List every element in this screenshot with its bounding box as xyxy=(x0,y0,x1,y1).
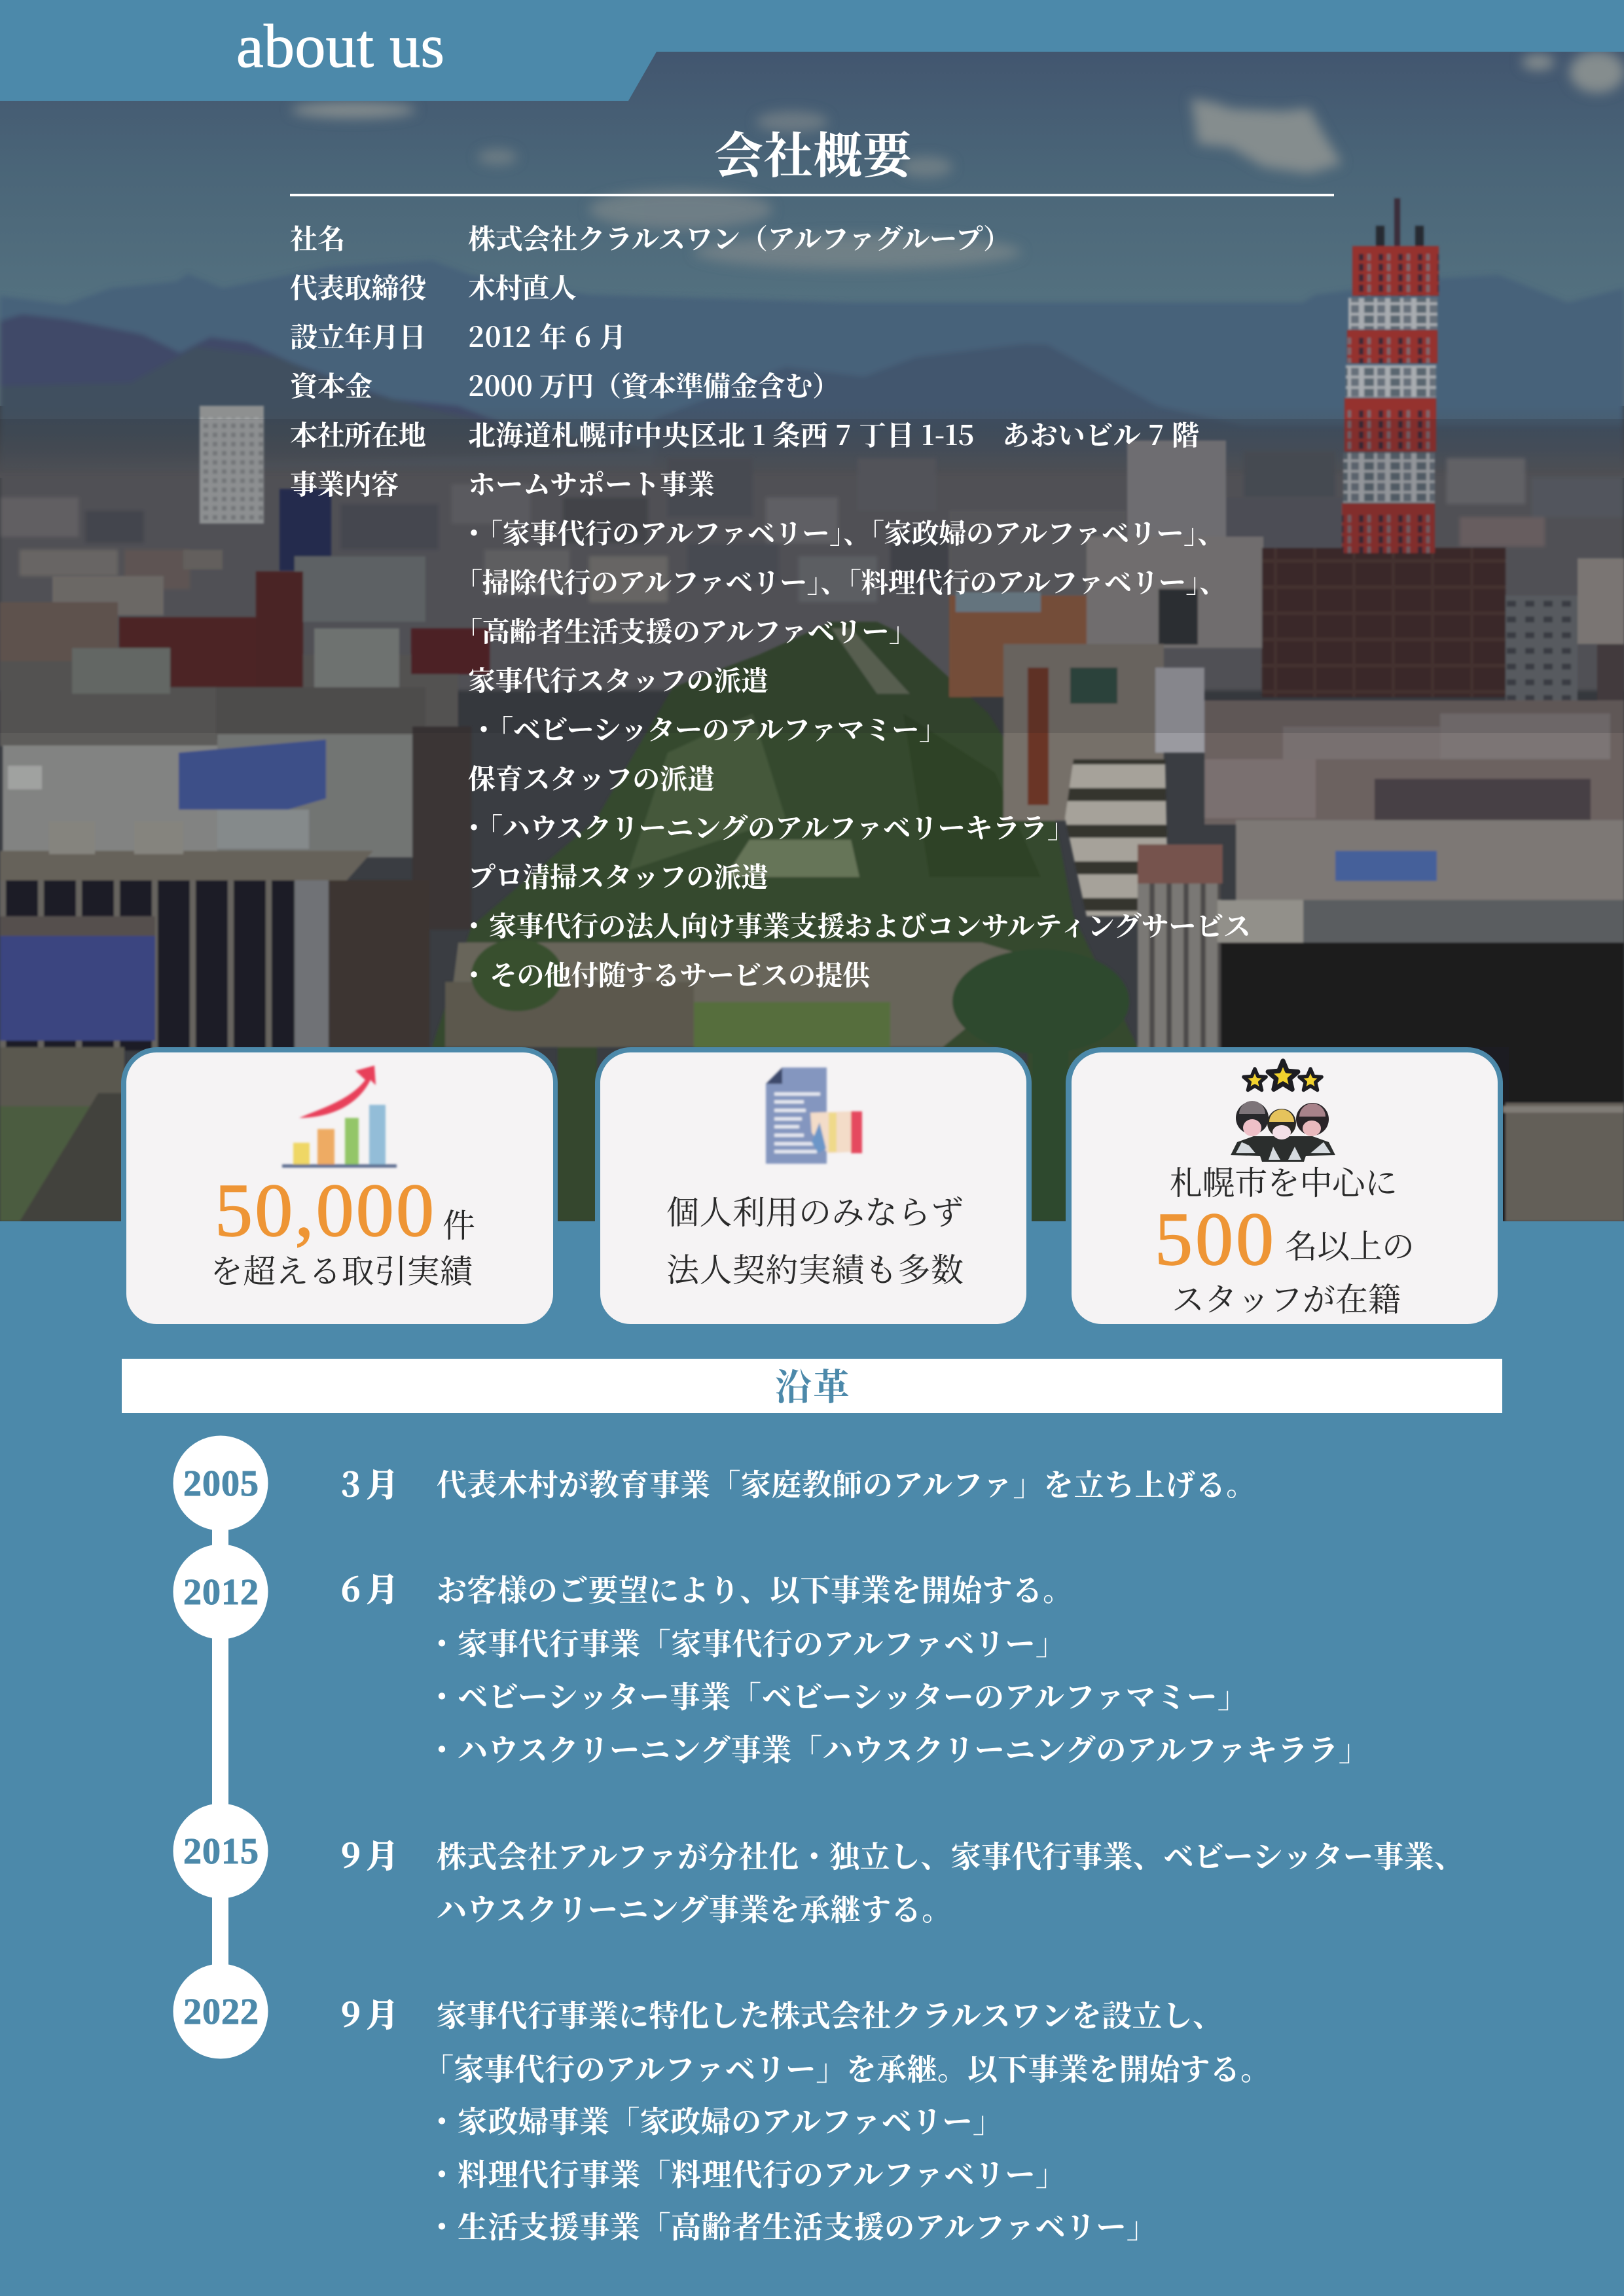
unit: 名以上の xyxy=(1285,1221,1415,1268)
card: 50,000 transactions xyxy=(121,1047,558,1329)
panel: company overview xyxy=(290,117,1334,994)
history 2015: 9 月 xyxy=(341,1830,399,1877)
section heading: history xyxy=(122,1359,1502,1413)
history 2022: 家政婦事業「家政婦のアルファベリー」 xyxy=(458,2098,1003,2142)
history 2022: ・ xyxy=(427,2151,457,2195)
right buildings xyxy=(1127,440,1226,553)
company table labels: 事業内容 xyxy=(290,463,399,503)
caption bottom: スタッフが在籍 xyxy=(1172,1274,1401,1321)
history 2012 xyxy=(341,1564,1369,1770)
company table values: 北海道札幌市中央区北 1 条西 7 丁目 1-15 あおいビル 7 階 xyxy=(468,414,1199,454)
history 2022: 料理代行事業「料理代行のアルファベリー」 xyxy=(458,2151,1066,2195)
marker 2012: 2012 xyxy=(183,1572,259,1613)
marker 2015 xyxy=(173,1804,268,1898)
company table values: その他付随するサービスの提供 xyxy=(490,954,872,994)
heading: company overview: 会社概要 xyxy=(714,117,913,187)
company table labels: 資本金 xyxy=(290,365,372,404)
history 2012: 6 月 xyxy=(341,1564,399,1611)
history 2015: ハウスクリーニング事業を承継する。 xyxy=(437,1886,952,1929)
background: Sapporo city photo xyxy=(0,0,1624,1221)
company table values: 株式会社クラルスワン（アルファグループ） xyxy=(468,218,1011,257)
history 2022: ・ xyxy=(427,2098,457,2142)
company table labels: 代表取締役 xyxy=(290,267,426,306)
marker 2012 xyxy=(173,1545,268,1639)
radio tower xyxy=(1394,198,1400,246)
timeline spine and year markers xyxy=(173,1436,268,2059)
icon: document and hand xyxy=(766,1067,862,1164)
company table values xyxy=(455,218,1251,994)
marker 2005: 2005 xyxy=(183,1463,259,1504)
company table values: 「ハウスクリーニングのアルファベリーキララ」 xyxy=(475,807,1075,846)
section heading: history: 沿革 xyxy=(775,1359,850,1411)
dense city blotches xyxy=(0,452,1624,691)
company table values: 2000 万円（資本準備金含む） xyxy=(468,365,840,404)
company table values: ・ xyxy=(460,807,488,846)
stat: 50,000: 50,000 xyxy=(215,1169,434,1253)
history 2012: お客様のご要望により、以下事業を開始する。 xyxy=(437,1567,1073,1610)
company table values: 2012 年 6 月 xyxy=(468,316,626,355)
history 2022: 「家事代行のアルファベリー」を承継。以下事業を開始する。 xyxy=(424,2046,1271,2089)
company table values: 「掃除代行のアルファベリー」、「料理代行のアルファベリー」、 xyxy=(455,562,1227,601)
company table values: ホームサポート事業 xyxy=(468,463,715,503)
card: 500 staff xyxy=(1066,1047,1503,1329)
stat: 500: 500 xyxy=(1155,1198,1274,1282)
history 2012: 家事代行事業「家事代行のアルファベリー」 xyxy=(458,1621,1066,1664)
history 2012: ・ xyxy=(427,1621,457,1664)
history 2005: 代表木村が教育事業「家庭教師のアルファ」を立ち上げる。 xyxy=(437,1462,1256,1505)
company table values: ・ xyxy=(460,905,488,944)
marker 2022: 2022 xyxy=(183,1992,259,2032)
history 2012: ハウスクリーニング事業「ハウスクリーニングのアルファキララ」 xyxy=(458,1727,1369,1770)
history 2022 xyxy=(341,1989,1271,2247)
top header band xyxy=(0,0,1624,101)
boulevard trees xyxy=(432,622,1139,1221)
company table values: 「ベビーシッターのアルファマミー」 xyxy=(486,709,947,748)
icon: rising bar chart xyxy=(282,1066,397,1168)
history 2022: ・ xyxy=(427,2204,457,2247)
company table values: プロ清掃スタッフの派遣 xyxy=(468,856,768,895)
history 2022: 家事代行事業に特化した株式会社クラルスワンを設立し、 xyxy=(437,1992,1223,2036)
heading: about us: about us xyxy=(236,12,444,81)
company table labels xyxy=(290,218,426,503)
about us tab xyxy=(0,0,657,101)
card: corporate contracts xyxy=(595,1047,1032,1329)
history 2015: 株式会社アルファが分社化・独立し、家事代行事業、ベビーシッター事業、 xyxy=(437,1833,1464,1876)
caption: を超える取引実績 xyxy=(210,1246,475,1293)
history 2012: ・ xyxy=(427,1727,457,1770)
marker 2022 xyxy=(173,1964,268,2059)
company table labels: 社名 xyxy=(290,218,345,257)
unit: ken: 件 xyxy=(442,1200,475,1247)
marker 2015: 2015 xyxy=(183,1831,259,1872)
marker 2005 xyxy=(173,1436,268,1530)
company table values: 家事代行スタッフの派遣 xyxy=(468,660,768,699)
lower blue section background xyxy=(0,1221,1624,2296)
history 2015 xyxy=(341,1830,1464,1929)
history 2005: 3 月 xyxy=(341,1459,399,1506)
company table labels: 設立年月日 xyxy=(290,316,426,355)
company table values: 保育スタッフの派遣 xyxy=(468,758,715,797)
history 2012: ベビーシッター事業「ベビーシッターのアルファマミー」 xyxy=(458,1674,1248,1717)
icon: three stars and staff xyxy=(1231,1061,1335,1162)
company table values: ・ xyxy=(460,512,488,552)
caption top: 札幌市を中心に xyxy=(1170,1157,1398,1204)
company table values: 「家事代行のアルファベリー」、「家政婦のアルファベリー」、 xyxy=(475,512,1225,552)
company table values: 「高齢者生活支援のアルファベリー」 xyxy=(455,611,916,650)
history 2022: 生活支援事業「高齢者生活支援のアルファベリー」 xyxy=(458,2204,1157,2247)
history 2022: 9 月 xyxy=(341,1989,399,2036)
company table values: ・ xyxy=(460,954,488,994)
caption line 1: 個人利用のみならず xyxy=(666,1187,964,1234)
company table labels: 本社所在地 xyxy=(290,414,426,454)
company table values: 家事代行の法人向け事業支援およびコンサルティングサービス xyxy=(489,905,1251,944)
company table values: 木村直人 xyxy=(468,267,577,306)
caption line 2: 法人契約実績も多数 xyxy=(666,1244,964,1291)
history 2012: ・ xyxy=(427,1674,457,1717)
company table values: ・ xyxy=(470,709,497,748)
